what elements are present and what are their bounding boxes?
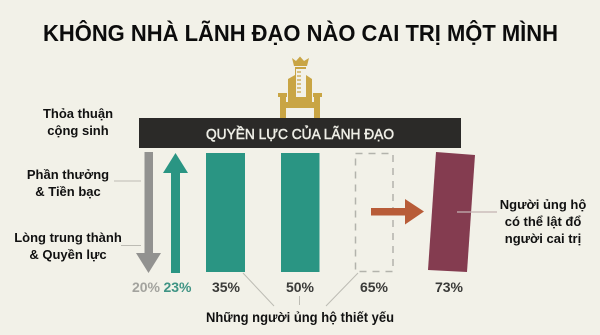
leader line: to 65% bar	[326, 273, 358, 306]
label: supporters can overthrow the ruler: người cai trị	[505, 231, 581, 246]
value: 23%: 23%	[163, 279, 192, 295]
label: loyalty and power: Lòng trung thành	[14, 230, 122, 245]
label: rewards and money: Phần thưởng	[27, 167, 109, 182]
leader line: tilted bar	[457, 211, 497, 213]
value: 50%: 50%	[286, 279, 315, 295]
leader line: rewards	[114, 180, 141, 182]
icon: throne with crown	[278, 56, 322, 118]
label: rewards and money: & Tiền bạc	[35, 184, 101, 199]
bar: dashed 65%	[356, 154, 393, 272]
arrow: grey down 20%	[136, 152, 161, 273]
value: 20%: 20%	[132, 279, 161, 295]
arrow: orange	[371, 199, 424, 224]
value: 65%: 65%	[360, 279, 389, 295]
label: supporters can overthrow the ruler: có thể lật đổ	[505, 214, 581, 229]
label: loyalty and power: & Quyền lực	[29, 247, 107, 262]
leader line: to 50% bar	[298, 296, 300, 305]
label: essential supporters: Những người ủng hộ thiết yếu	[206, 310, 394, 325]
value: 35%: 35%	[212, 279, 241, 295]
leader line: to 35% bar	[243, 273, 274, 306]
label: symbiotic agreement: Thỏa thuận	[43, 106, 113, 121]
title: KHÔNG NHÀ LÃNH ĐẠO NÀO CAI TRỊ MỘT MÌNH	[43, 19, 558, 46]
bar: tilted 73%	[428, 152, 475, 272]
value: 73%: 73%	[435, 279, 464, 295]
bar: 50%	[281, 153, 320, 272]
label: symbiotic agreement: cộng sinh	[47, 123, 109, 138]
arrow: teal up 23%	[163, 153, 188, 273]
bar: 35%	[206, 153, 245, 272]
label: supporters can overthrow the ruler: Người ủng hộ	[500, 197, 586, 212]
power bar label: QUYỀN LỰC CỦA LÃNH ĐẠO	[206, 125, 394, 143]
power bar	[139, 118, 461, 148]
leader line: loyalty	[121, 244, 141, 246]
